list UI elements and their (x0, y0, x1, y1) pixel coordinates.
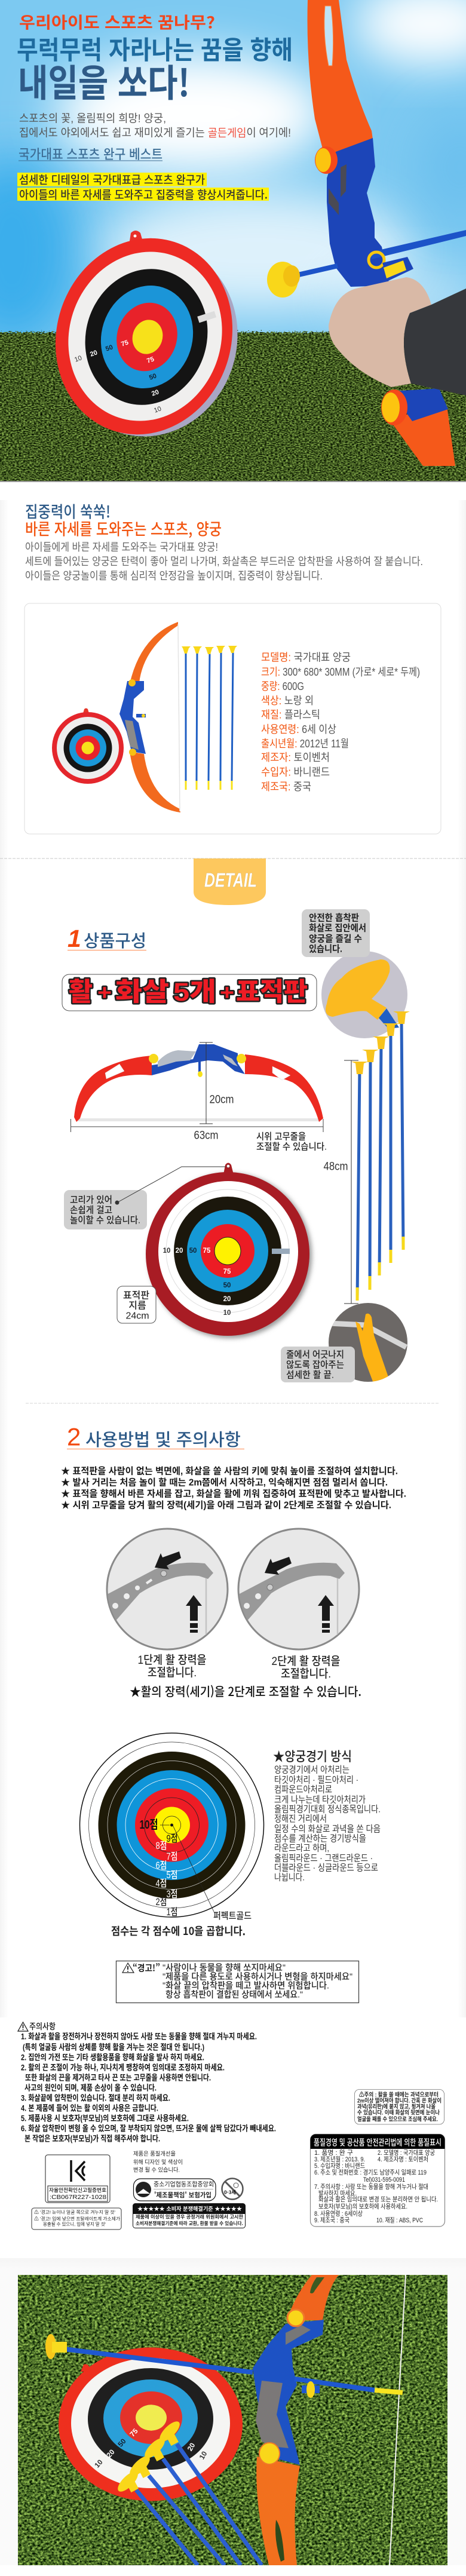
rules paragraph: 올림픽라운드 · 그랜드라운드 · (274, 1853, 373, 1864)
banner: set contents: 화살 (115, 978, 169, 1007)
quality label box: 6. 주소 및 전화번호 : 경기도 남양주시 일패로 119 (314, 2168, 427, 2176)
insurance badge (134, 2179, 216, 2201)
grass field (0, 332, 466, 487)
caution list: (특히 얼굴등 사람의 상체를 향해 활을 겨누는 것은 절대 안 됩니다.) (23, 2043, 204, 2051)
target on grass: 75 (146, 355, 155, 365)
note: score multiplier: 점수는 각 점수에 10을 곱합니다. (111, 1923, 246, 1939)
caution list (21, 2032, 276, 2143)
target on grass (55, 231, 238, 436)
score labels: 10점 (140, 1818, 158, 1832)
callout text: 화살로 집안에서 (309, 922, 366, 933)
score labels: 4점 (155, 1878, 167, 1889)
quality label box: Tel)031-595-0091 (363, 2176, 405, 2184)
caution list: 5. 제품사용 시 보호자(부모님)의 보호하에 그대로 사용하세요. (21, 2114, 189, 2123)
spec list: 수입자: 바니랜드 (261, 766, 330, 778)
five arrows (182, 646, 237, 790)
usage bullets: ★ 표적을 향해서 바른 자세를 잡고, 화살을 활에 끼워 집중하여 표적판에 맞추고 발사합니다. (61, 1489, 406, 1499)
highlighted copy: 아이들의 바른 자세를 도와주고 집중력을 향상시켜줍니다. (19, 186, 268, 202)
score labels: 8점 (155, 1840, 167, 1851)
hero subheading: 국가대표 스포츠 완구 베스트 (19, 144, 163, 163)
small bow (119, 622, 180, 812)
caution list: 4. 본 제품에 들어 있는 활 이외의 사용은 금합니다. (21, 2104, 158, 2112)
hand (329, 277, 431, 387)
large target (146, 1163, 312, 1338)
panel: cautions: 주의사항 (29, 2020, 56, 2032)
target: 75 (128, 2427, 140, 2439)
hero paragraph: 집에서도 야외에서도 쉽고 재미있게 즐기는 골든게임이 여기에! (19, 127, 291, 139)
cup (326, 959, 399, 1029)
scoring target (80, 1733, 264, 1918)
score labels: 1점 (166, 1906, 178, 1918)
detail tab (194, 858, 266, 905)
caution box: distance: 과녁(유리판)에 붙지 않고, 튕겨져 나올 (357, 2103, 436, 2110)
grass (18, 2275, 447, 2565)
callout text: 있습니다. (309, 944, 342, 955)
caption: string (256, 1131, 327, 1152)
target on grass: 20 (89, 349, 99, 358)
usage bullets: ★ 표적판을 사람이 없는 벽면에, 화살을 쏠 사람의 키에 맞춰 높이를 조절하여 설치합니다. (61, 1466, 398, 1477)
consumer dispute box (133, 2203, 245, 2228)
hero bottom rule (0, 481, 466, 482)
icon: warning triangle (122, 1963, 134, 1973)
page side shading (0, 500, 466, 2017)
banner: set contents: + (220, 980, 234, 1005)
rules paragraph: 나뉩니다. (274, 1872, 305, 1883)
arrow rest (198, 1062, 201, 1074)
callout: suction cup zoom (302, 909, 407, 1038)
ring values: 50 (189, 1247, 197, 1255)
ring values: 75 (203, 1247, 211, 1255)
note: design change: 제품은 품질개선을 (133, 2151, 176, 2158)
rules paragraph: 정해진 거리에서 (274, 1814, 327, 1824)
bowstring (78, 1118, 320, 1121)
target on grass: 10 (73, 354, 83, 364)
ring values: 20 (223, 1296, 231, 1303)
highlighted copy (17, 171, 269, 202)
callout: hook: 손쉽게 걸고 (70, 1204, 112, 1215)
target (59, 2348, 243, 2501)
note: design change: 변경 될 수 있습니다. (133, 2166, 180, 2173)
quality label box (311, 2134, 444, 2227)
target on grass: 50 (148, 372, 158, 382)
callout: diameter: 지름 (128, 1300, 146, 1311)
score labels (140, 1818, 178, 1918)
warning box (116, 1961, 358, 2002)
KC certification box (45, 2155, 110, 2203)
warning label small: 용출될 수 있으니, 입에 넣지 말 것' (43, 2221, 106, 2227)
perfect gold leader (173, 1825, 214, 1912)
caution box: distance: 2m이상 떨어져야 합니다. 간혹 쏜 화살이 (357, 2097, 442, 2104)
warning box: "제품을 다른 용도로 사용하시거나 변형을 하지마세요" (163, 1971, 352, 1982)
spec list: 색상: 노랑 외 (261, 695, 314, 707)
insurance badge: '제조물책임' 보험가입 (154, 2190, 211, 2200)
quality label box: 9. 제조국 : 중국 (314, 2216, 350, 2224)
bowstring (390, 2275, 406, 2565)
target on grass: 75 (120, 339, 130, 348)
small target (52, 709, 124, 784)
bottom photo backdrop (0, 2258, 466, 2576)
quality label box: 1. 품명 : 완 구 (314, 2149, 353, 2157)
caution list: 또한 화살의 끈을 제거하고 타사 끈 또는 고무줄을 사용하면 안됩니다. (25, 2073, 211, 2083)
ring values: 10 (223, 1310, 231, 1317)
hero line 3: 내일을 쏘다! (18, 54, 190, 108)
quality label box: 2. 모델명 : 국가대표 양궁 (378, 2149, 435, 2157)
usage bullets: ★ 발사 거리는 처음 놀이 할 때는 2m쯤에서 시작하고, 익숙해지면 점점 멀리서 쏩니다. (61, 1477, 388, 1488)
dimension: 48cm: 48cm (324, 1160, 348, 1173)
hanger tab (223, 1163, 234, 1174)
hero line 1: 우리아이도 스포츠 꿈나무? (19, 10, 215, 33)
rules paragraph: 타깃아처리 · 필드아처리 · (274, 1774, 358, 1785)
rules paragraph: 라운드라고 하며, (274, 1842, 329, 1853)
dimension: 63cm (70, 1119, 323, 1142)
spec list: 재질: 플라스틱 (261, 709, 320, 720)
arrow across bow (45, 2334, 403, 2398)
spec list: 중량: 600G (261, 680, 304, 692)
spec list: 사용연령: 6세 이상 (261, 723, 336, 735)
dashed divider middle (26, 1403, 439, 1404)
rules paragraph (274, 1765, 381, 1883)
quality label box: 10. 재질 : ABS, PVC (376, 2216, 423, 2224)
spec list: 제조자: 토이벤처 (261, 752, 330, 763)
usage bullets (61, 1466, 406, 1510)
dashed divider top (0, 858, 466, 859)
panel: product specs (24, 603, 441, 834)
panel: archery rules (273, 1746, 381, 1883)
ring values: 10 (163, 1247, 170, 1255)
spec list: 모델명: 국가대표 양궁 (261, 651, 351, 663)
target on grass: 10 (153, 405, 163, 415)
hero line 2: 무럭무럭 자라나는 꿈을 향해 (17, 30, 293, 67)
intro paragraph (25, 541, 423, 582)
dimension: 63cm: 63cm (194, 1129, 219, 1142)
quality label box: 3. 제조년월 : 2013. 9. (314, 2155, 365, 2163)
warning box: "화살 끝의 압착판을 떼고 발사하면 위험합니다. (163, 1981, 329, 1991)
caution list: 1. 화살과 활을 장전하거나 장전하지 않아도 사람 또는 동물을 향해 절대 겨누지 마세요. (21, 2032, 257, 2041)
banner: set contents (62, 974, 317, 1011)
spec list (261, 651, 420, 793)
target: 10 (93, 2458, 105, 2470)
caption: string: 시위 고무줄을 (256, 1131, 306, 1142)
banner: set contents: 활 (69, 978, 93, 1007)
score labels: 6점 (155, 1860, 167, 1871)
note: design change: 위해 디자인 및 색상이 (133, 2159, 183, 2166)
note: design change (133, 2151, 183, 2173)
callout: diameter (117, 1286, 156, 1323)
panel: archery rules: ★양궁경기 방식 (273, 1746, 352, 1765)
banner: set contents: + (97, 980, 112, 1005)
quality label box: 7. 주의사항 : 사람 또는 동물을 향해 겨누거나 절대 (314, 2182, 428, 2191)
callout: nock detail: 않도록 잡아주는 (286, 1360, 344, 1370)
banner: set contents: 5개 (173, 978, 216, 1007)
score labels: 9점 (166, 1833, 178, 1844)
rules paragraph: 컴파운드아처리로 (274, 1784, 332, 1795)
quality label box: 8. 사용연령 : 6세이상 (314, 2210, 363, 2218)
callout text (302, 909, 370, 957)
quality label box: 발사하지 마세요. (318, 2189, 357, 2197)
score labels: 2점 (155, 1896, 167, 1908)
icon: age warning (222, 2178, 243, 2200)
intro heading: 바른 자세를 도와주는 스포츠, 양궁 (25, 516, 222, 540)
callout text: 양궁을 즐길 수 (309, 933, 362, 944)
score labels: 5점 (166, 1869, 178, 1881)
callout: hook (64, 1167, 226, 1229)
KC certification box: :CB067R227-1028 (50, 2194, 106, 2201)
icon: caution (18, 2022, 28, 2031)
note: tension: ★활의 장력(세기)을 2단계로 조절할 수 있습니다. (130, 1682, 361, 1700)
spec list: 출시년월: 2012년 11월 (261, 738, 349, 750)
intro paragraph: 아이들은 양궁놀이를 통해 심리적 안정감을 높이지며, 집중력이 향상됩니다. (25, 570, 323, 582)
caution box: distance: ⚠주의 : 활을 쏠 때에는 과녁으로부터 (359, 2091, 439, 2098)
arrow shaft (290, 230, 466, 279)
diagram: tension step 2 (236, 1529, 359, 1649)
quality label box: 보호자(부모님)의 보호하에 사용하세요. (318, 2202, 407, 2210)
score labels: 3점 (166, 1888, 178, 1900)
limb slots (105, 1064, 290, 1080)
KC certification box: 자율안전확인신고필증번호 (49, 2186, 106, 2194)
intro heading (25, 499, 222, 540)
caption: step 1: 1단계 활 장력을 (137, 1654, 207, 1667)
callout: nock detail: 섬세한 활 끝. (286, 1369, 334, 1380)
target: 50 (116, 2437, 128, 2449)
target: 10 (198, 2449, 209, 2461)
knobs (149, 1054, 158, 1063)
caution list: 2. 집안의 가전 또는 기타 생활용품을 향해 화살을 발사 하지 마세요. (21, 2053, 204, 2062)
gray circle (321, 951, 407, 1038)
rules paragraph: 더블라운드 · 싱글라운드 등으로 (274, 1863, 378, 1873)
consumer dispute box: ★★★★★ 소비자 분쟁해결기준 ★★★★★ (137, 2204, 242, 2213)
panel: bottom photo (18, 2275, 447, 2565)
bow (253, 2275, 339, 2565)
warning box: 항상 흡착판이 결합된 상태에서 쏘세요." (165, 1989, 303, 2000)
caption: step 2: 2단계 활 장력을 (271, 1655, 341, 1668)
warning label small: ⚠ '경고! 눈이나 얼굴 쪽으로 겨누지 말 것' (34, 2209, 116, 2215)
ring values (163, 1247, 231, 1317)
consumer dispute box: 제품에 이상이 있을 경우 공정거래 위원회에서 고시한 (136, 2214, 244, 2220)
large bow (74, 1044, 323, 1122)
target: 20 (186, 2441, 197, 2452)
grip (152, 1044, 245, 1075)
usage bullets: ★ 시위 고무줄을 당겨 활의 장력(세기)을 아래 그림과 같이 2단계로 조절할 수 있습니다. (61, 1499, 391, 1510)
caution list: 3. 화살끝에 압착판이 있습니다. 절대 분리 하지 마세요. (21, 2093, 170, 2103)
callout text: 안전한 흡착판 (309, 913, 359, 924)
banner: set contents: 표적판 (236, 978, 308, 1007)
insurance badge: 중소기업협동조합중앙회 (154, 2179, 214, 2189)
consumer dispute box: 소비자분쟁해결기준에 따라 교환, 환불 받을 수 있습니다. (136, 2220, 243, 2227)
target: 20 (105, 2448, 116, 2460)
target on grass: 50 (105, 344, 114, 353)
hero bow (267, 0, 466, 466)
callout: hook: 놀이할 수 있습니다. (70, 1215, 140, 1226)
caution list: 본 작업은 보호자(부모님)가 직접 해주셔야 합니다. (24, 2134, 160, 2143)
caution box: distance: 수 있습니다. 이때 화살의 뒷면에 눈이나 (357, 2109, 440, 2116)
section 2 heading: 2 (67, 1423, 81, 1450)
quality label box: 화살과 활은 임의대로 변경 또는 분리하면 안 됩니다. (318, 2195, 438, 2203)
dimension: 20cm (200, 1042, 234, 1124)
hero paragraph: 스포츠의 꽃, 올림픽의 희망! 양궁, (19, 112, 166, 124)
intro paragraph: 세트에 들어있는 양궁은 탄력이 좋아 멀리 나가며, 화살촉은 부드러운 압착판을 사용하여 잘 붙습니다. (25, 556, 423, 568)
detail tab: DETAIL (204, 869, 257, 891)
callout: nock detail (281, 1303, 407, 1383)
dimension: 20cm: 20cm (209, 1093, 234, 1106)
target on grass: 20 (151, 388, 160, 398)
rules paragraph: 양궁경기에서 아처리는 (274, 1765, 350, 1775)
callout: diameter: 24cm (125, 1311, 149, 1321)
diagram: tension step 1 (105, 1529, 228, 1649)
caption: string: 조절할 수 있습니다. (256, 1141, 327, 1152)
intro paragraph: 아이들에게 바른 자세를 도와주는 국가대표 양궁! (25, 541, 218, 553)
quality label box: 4. 제조자명 : 토이벤처 (378, 2155, 428, 2163)
warning box: "사람이나 동물을 향해 쏘지마세요" (163, 1963, 286, 1973)
highlighted copy: 섬세한 디테일의 국가대표급 스포츠 완구가 (19, 171, 205, 188)
caution list: 사고의 원인이 되며, 제품 손상이 올 수 있습니다. (24, 2084, 157, 2092)
section 1 heading: 상품구성 (84, 927, 146, 952)
caution list: 6. 화살 압착판이 변형 올 수 있으며, 잘 부착되지 않으면, 뜨거운 물에 살짝 담갔다가 빼내세요. (21, 2124, 276, 2133)
quality label box: 5. 수입자명 : 바니랜드 (314, 2162, 365, 2170)
section 1 heading: 1 (68, 925, 81, 952)
callout: nock detail: 줄에서 어긋나지 (286, 1349, 344, 1360)
warning box: “경고!” (133, 1962, 160, 1974)
caption: step 2 (271, 1655, 341, 1680)
suction cup (267, 262, 298, 298)
caution box: distance (355, 2090, 444, 2124)
arrow rest (369, 252, 384, 268)
spec list: 크기: 300* 680* 30MM (가로* 세로* 두께) (261, 666, 420, 678)
dimension: 48cm (324, 1060, 358, 1304)
callout: hook: 고리가 있어 (70, 1195, 112, 1206)
rules paragraph: 크게 나누는데 타깃아처리가 (274, 1795, 366, 1805)
label: perfect gold: 퍼펙트골드 (213, 1909, 252, 1922)
five large arrows (351, 1011, 410, 1301)
ring values: 75 (223, 1268, 231, 1275)
caption: step 2: 조절합니다. (281, 1667, 331, 1680)
intro heading: 집중력이 쑥쑥! (25, 499, 111, 522)
sleeve (404, 289, 466, 395)
score labels: 7점 (166, 1851, 178, 1862)
panel: cautions (18, 2020, 276, 2143)
section 2 heading: 사용방법 및 주의사항 (85, 1426, 241, 1451)
ring values: 50 (223, 1282, 231, 1289)
rules paragraph: 점수를 계산하는 경기방식을 (274, 1833, 366, 1844)
rules paragraph: 올림픽경기대회 정식종목입니다. (274, 1804, 381, 1815)
limbs (74, 1056, 152, 1122)
hero paragraph (19, 112, 291, 139)
icon: age warning: 0-3세 (224, 2189, 236, 2196)
icon: KC mark (71, 2160, 85, 2182)
warning label small: ⚠ '경고! 입에 넣으면 프탈레이트계 가소제가 (34, 2215, 120, 2221)
caption: step 1: 조절합니다. (148, 1666, 197, 1679)
panel: hero photo (0, 0, 466, 487)
caution box: distance: 얼굴을 째를 수 있으므로 조심해 주세요. (357, 2116, 438, 2123)
warning label small (32, 2208, 121, 2230)
sky background (0, 0, 466, 346)
caution list: 2. 활의 끈 조절이 가능 하나, 지나치게 팽창하여 임의대로 조정하지 마세요. (21, 2063, 225, 2072)
caption: step 1 (137, 1654, 207, 1679)
callout: diameter: 표적판 (123, 1290, 149, 1301)
panel: intro (25, 499, 423, 582)
ring values: 20 (176, 1247, 183, 1255)
four arrows (115, 2418, 262, 2565)
rules paragraph: 일정 수의 화살로 과녁을 쏜 다음 (274, 1823, 381, 1834)
spec list: 제조국: 중국 (261, 781, 311, 793)
